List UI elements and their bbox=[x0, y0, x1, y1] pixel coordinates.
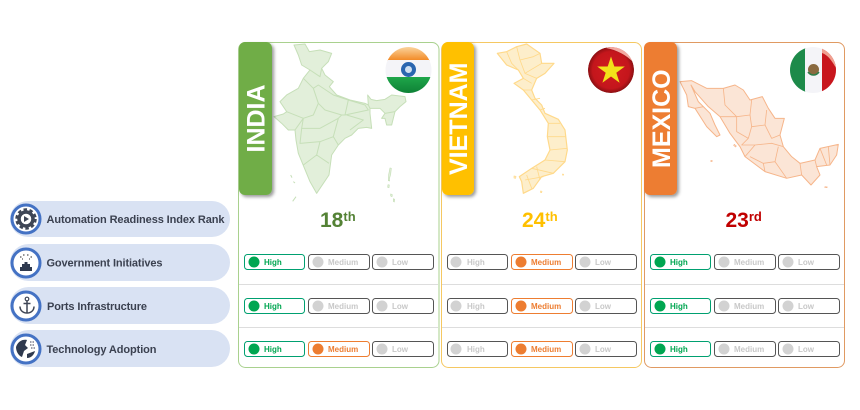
rating row: Technology Adoption: Medium bbox=[734, 345, 764, 354]
tab: MEXICO bbox=[644, 42, 677, 195]
rating row: Ports Infrastructure: Low bbox=[798, 302, 815, 311]
tab: VIETNAM bbox=[442, 42, 474, 195]
rating row: Technology Adoption bbox=[650, 342, 840, 356]
rank: India 18th: th bbox=[343, 209, 356, 224]
rank: India 18th: 18 bbox=[320, 209, 343, 232]
rank: Mexico 23rd: rd bbox=[749, 209, 762, 224]
map: India bbox=[274, 44, 406, 202]
rating row: Government Initiatives bbox=[448, 254, 636, 270]
tab: MEXICO: MEXICO bbox=[648, 69, 676, 168]
row label: Government Initiatives bbox=[10, 244, 230, 281]
tab: VIETNAM: VIETNAM bbox=[445, 62, 473, 175]
rating row: Ports Infrastructure: High bbox=[264, 302, 282, 311]
map: Vietnam bbox=[497, 44, 567, 193]
rating row: Ports Infrastructure bbox=[244, 298, 434, 314]
row label: Technology Adoption: Technology Adoption bbox=[46, 344, 157, 356]
rating row: Government Initiatives bbox=[244, 254, 434, 270]
tab: INDIA: INDIA bbox=[242, 84, 270, 152]
rating row: Technology Adoption: High bbox=[467, 345, 485, 354]
rating row: Technology Adoption: Low bbox=[392, 345, 409, 354]
row label: Ports Infrastructure bbox=[10, 287, 230, 324]
rating row: Government Initiatives: Medium bbox=[328, 258, 358, 267]
row label: Automation Readiness Index Rank bbox=[10, 201, 230, 237]
icon: anchor bbox=[12, 292, 40, 320]
icon: government building bbox=[12, 249, 40, 277]
row label: Government Initiatives: Government Initiatives bbox=[46, 258, 162, 270]
rating row: Technology Adoption: Low bbox=[798, 345, 815, 354]
rating row: Ports Infrastructure: Low bbox=[595, 302, 612, 311]
panel: Vietnam bbox=[442, 42, 642, 368]
rating row: Government Initiatives: Medium bbox=[531, 258, 561, 267]
rank: Vietnam 24th: 24 bbox=[522, 209, 545, 232]
rating row: Technology Adoption: High bbox=[264, 345, 282, 354]
rating row: Ports Infrastructure: High bbox=[467, 302, 485, 311]
icon: gear bbox=[12, 205, 40, 233]
rating row: Government Initiatives: High bbox=[670, 258, 688, 267]
rating row: Government Initiatives: Medium bbox=[734, 258, 764, 267]
rating row: Government Initiatives: High bbox=[264, 258, 282, 267]
rating row: Government Initiatives: High bbox=[467, 258, 485, 267]
rating row: Technology Adoption: Medium bbox=[328, 345, 358, 354]
rating row: Ports Infrastructure: Low bbox=[392, 302, 409, 311]
flag: India bbox=[385, 46, 432, 94]
rating row: Ports Infrastructure: Medium bbox=[531, 302, 561, 311]
flag: Mexico bbox=[790, 47, 837, 93]
tab: INDIA bbox=[239, 42, 272, 195]
rating row: Technology Adoption: High bbox=[670, 345, 688, 354]
row label: Technology Adoption bbox=[10, 330, 230, 367]
panel: India bbox=[238, 42, 439, 368]
icon: technology globe bbox=[12, 335, 40, 363]
rating row: Ports Infrastructure bbox=[448, 298, 636, 314]
rating row: Ports Infrastructure: Medium bbox=[328, 302, 358, 311]
rating row: Government Initiatives: Low bbox=[798, 258, 815, 267]
flag: Vietnam bbox=[588, 47, 634, 93]
row label: Automation Readiness Index Rank: Automation Readiness Index Rank bbox=[46, 214, 225, 226]
map: Mexico bbox=[680, 81, 838, 188]
rating row: Government Initiatives bbox=[650, 254, 840, 270]
rating row: Government Initiatives: Low bbox=[595, 258, 612, 267]
rating row: Ports Infrastructure bbox=[650, 298, 840, 314]
rank: Mexico 23rd: 23 bbox=[726, 209, 749, 232]
rating row: Ports Infrastructure: Medium bbox=[734, 302, 764, 311]
rating row: Ports Infrastructure: High bbox=[670, 302, 688, 311]
row label: Ports Infrastructure: Ports Infrastructure bbox=[47, 301, 147, 313]
rating row: Government Initiatives: Low bbox=[392, 258, 409, 267]
rating row: Technology Adoption: Medium bbox=[531, 345, 561, 354]
rating row: Technology Adoption: Low bbox=[595, 345, 612, 354]
panel: Mexico bbox=[644, 42, 844, 368]
rank: Vietnam 24th: th bbox=[545, 209, 558, 224]
rating row: Technology Adoption bbox=[448, 342, 636, 356]
rating row: Technology Adoption bbox=[244, 342, 434, 356]
